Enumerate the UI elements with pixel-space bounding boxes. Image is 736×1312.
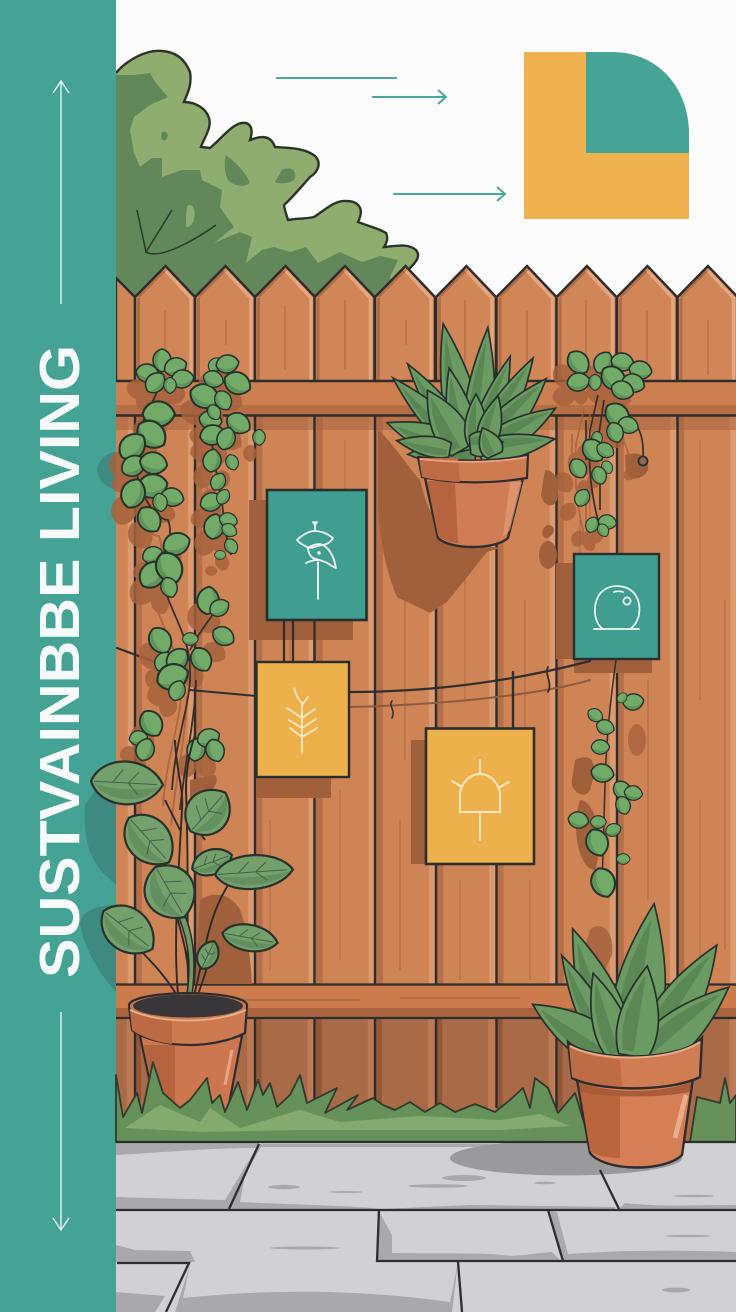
ivy vine shadow	[105, 365, 256, 826]
fence body planks	[116, 415, 736, 985]
pot body	[577, 1078, 693, 1168]
panel title: SUSTVAINBBE LIVING	[28, 345, 92, 978]
pickets	[116, 266, 736, 382]
rim highlight	[130, 1010, 246, 1020]
rail shadow	[116, 416, 736, 430]
ivy vine: top right shadow	[549, 360, 639, 553]
pot body	[140, 1036, 242, 1120]
panel shadows	[80, 452, 116, 992]
ivy stems	[135, 385, 231, 810]
soil	[133, 994, 243, 1018]
ivy stems	[602, 660, 616, 880]
arrow: up	[53, 81, 69, 304]
grass highlight	[125, 1105, 570, 1132]
plank lines	[135, 416, 678, 1108]
paving shadows	[116, 1140, 736, 1312]
hanging pot rim	[418, 455, 528, 482]
wire	[117, 620, 590, 727]
bush	[116, 51, 418, 310]
icon: bird	[297, 522, 336, 599]
plant leaves	[90, 760, 294, 973]
pot rim	[568, 1038, 702, 1088]
plant stems	[135, 735, 230, 1010]
icon: dome lamp	[452, 760, 509, 840]
lower rail	[116, 984, 736, 1018]
ivy vine: lower right	[567, 660, 645, 901]
shadows on fence	[190, 430, 652, 985]
hanging plant leaves	[382, 320, 562, 467]
right potted plant	[522, 900, 736, 1168]
soil	[573, 1035, 697, 1059]
teal sign: bird	[267, 490, 366, 620]
grass	[116, 1062, 736, 1142]
accent arrows	[276, 78, 505, 201]
hanging pot body	[425, 478, 523, 547]
icon: leaf branch	[287, 688, 317, 753]
plant blades	[522, 900, 736, 1075]
ivy vine: top right	[563, 346, 653, 539]
yellow sign: dome lamp	[426, 728, 534, 864]
teal sign: globe	[574, 554, 659, 659]
ivy vine: left	[114, 349, 265, 810]
ivy stems	[586, 395, 643, 520]
hanging potted plant	[382, 320, 562, 547]
logo block	[524, 52, 689, 219]
left panel	[0, 0, 116, 1312]
wood grain	[165, 300, 725, 980]
plant stem fill	[178, 915, 194, 1008]
left potted plant	[90, 735, 294, 1120]
arrow: down	[53, 1012, 69, 1230]
icon: sphere	[594, 586, 639, 629]
paving	[116, 1140, 736, 1312]
pot rim	[129, 993, 247, 1045]
yellow sign: leaf	[256, 662, 349, 777]
fence lower planks	[116, 1018, 736, 1142]
fence	[116, 266, 736, 1142]
top rail	[116, 381, 736, 416]
paving joints	[116, 1142, 736, 1312]
